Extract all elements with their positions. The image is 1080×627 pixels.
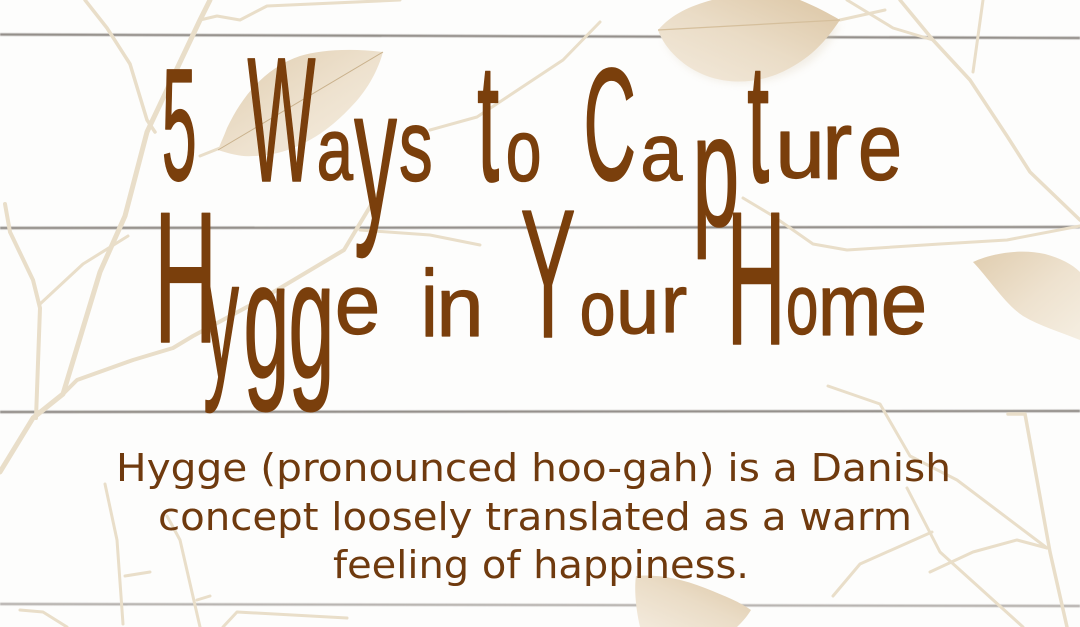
title line 1: a	[317, 101, 354, 199]
title line 2: o	[786, 258, 818, 352]
twigs: right branches	[743, 0, 1080, 627]
title line 1: t	[477, 29, 499, 218]
title line 2: i	[421, 252, 438, 357]
title line 1: a	[640, 107, 683, 197]
title line 1: o	[506, 102, 541, 200]
title line 2: n	[436, 259, 484, 354]
title line 2: u	[616, 260, 659, 350]
leaf: behind title	[218, 50, 383, 156]
twigs: left branches	[0, 0, 600, 627]
intro paragraph	[116, 446, 951, 587]
title line 2: H	[154, 173, 217, 382]
title: 5 Ways to Capture Hygge in Your Home	[154, 20, 927, 414]
title line 1	[162, 20, 902, 260]
title line 1: p	[692, 82, 739, 260]
title line 1: e	[858, 94, 902, 200]
title line 2: y	[203, 223, 239, 414]
title line 1: r	[822, 91, 852, 201]
title line 2: g	[288, 227, 335, 413]
leaf: right edge	[973, 252, 1080, 340]
title line 2: g	[243, 227, 290, 413]
title line 1: t	[747, 28, 769, 219]
title line 2: o	[580, 266, 615, 352]
leaf: top right	[658, 0, 840, 83]
title line 2: m	[818, 257, 881, 354]
title line 2: r	[661, 257, 687, 350]
title line 2: e	[335, 257, 380, 352]
title line 2: H	[726, 174, 786, 386]
title line 1: s	[399, 90, 433, 203]
title line 1: W	[247, 20, 316, 219]
intro paragraph: concept loosely translated as a warm	[158, 495, 912, 539]
title line 1: C	[583, 35, 636, 214]
intro paragraph: feeling of happiness.	[333, 543, 749, 587]
title line 2	[154, 172, 927, 414]
title line 2: Y	[520, 172, 576, 377]
title line 2: e	[881, 255, 927, 353]
title line 1: u	[775, 100, 825, 196]
title line 1: 5	[162, 35, 197, 214]
leaf: bottom centre	[635, 576, 751, 627]
intro paragraph: Hygge (pronounced hoo-gah) is a Danish	[116, 446, 951, 490]
title line 1: y	[354, 49, 397, 258]
